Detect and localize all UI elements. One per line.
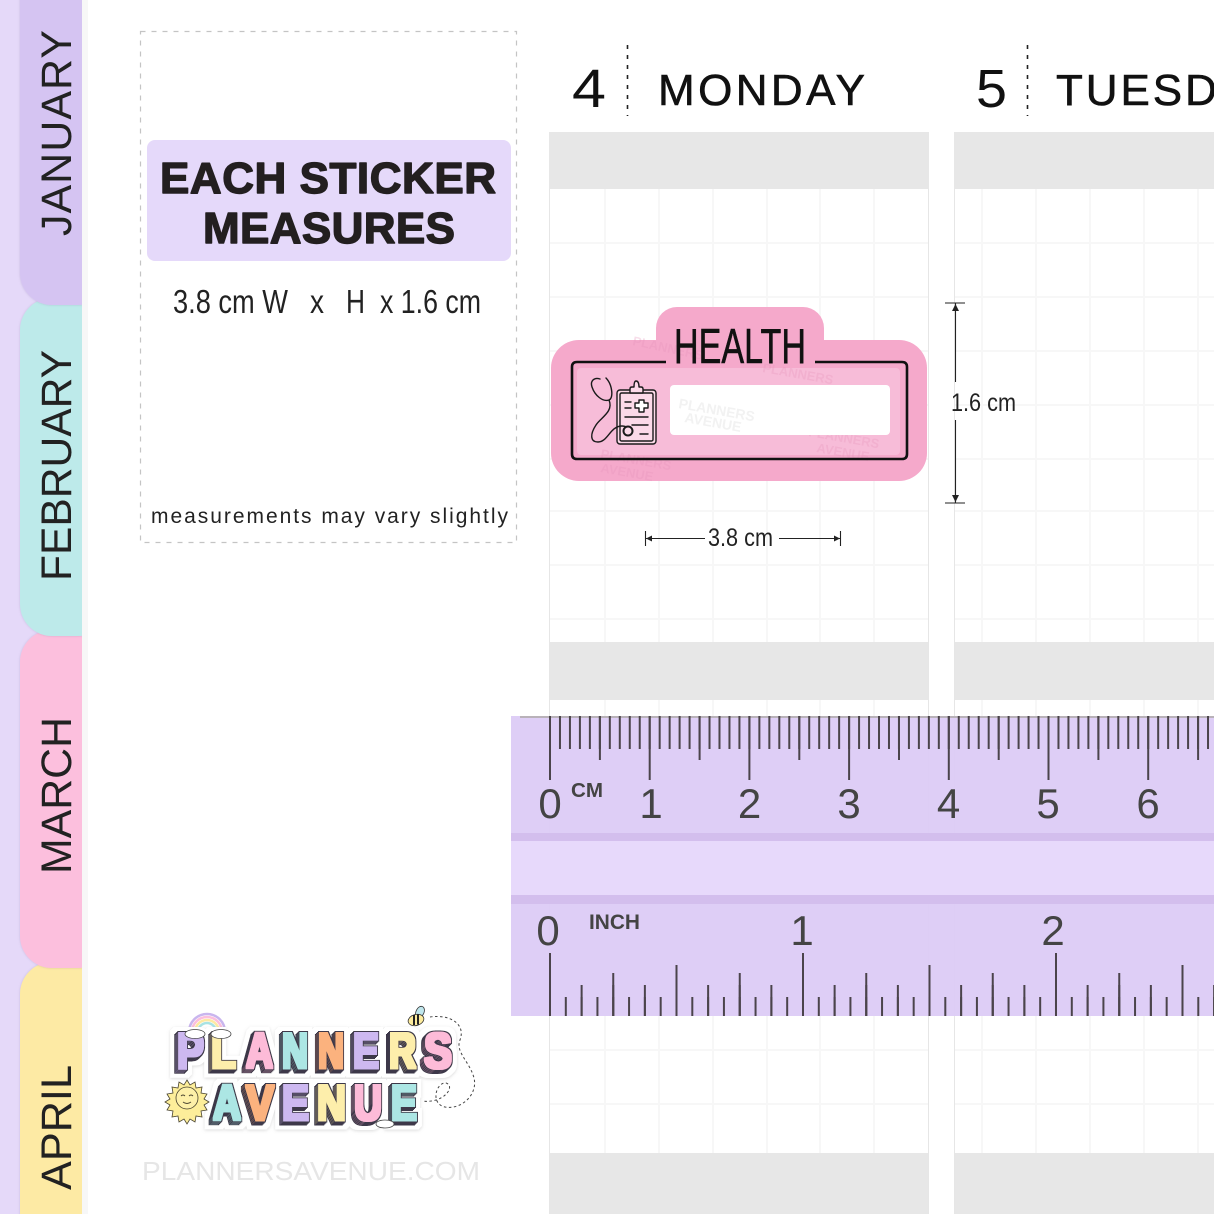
tab: February: [20, 298, 110, 636]
ruler: centimetre numbers: 2: [738, 780, 761, 827]
planner column: Tuesday: [954, 132, 1214, 1214]
watermarks: PLANNERS: [807, 424, 881, 451]
logo: letters: L: [211, 1023, 236, 1079]
logo: clouds: [185, 1030, 394, 1128]
logo: dotted bee trail: [422, 1016, 475, 1107]
ruler: inch numbers: 0: [536, 907, 560, 954]
tab: January: [20, 0, 110, 305]
ruler: centimetre numbers: 5: [1036, 780, 1060, 827]
logo: letters: [177, 1023, 452, 1131]
heading: each sticker measures: [147, 140, 511, 261]
text: dimensions: [173, 283, 481, 320]
ruler: INCH label: INCH: [589, 911, 640, 934]
watermarks: AVENUE: [599, 460, 655, 484]
header: Tuesday: [976, 45, 1214, 119]
planner column: Monday: [549, 132, 929, 1214]
ruler: centimetre numbers: 0: [538, 780, 562, 827]
logo: letters: U: [354, 1075, 382, 1131]
sticker: write-in box: [670, 385, 890, 435]
ruler: inch ticks: [549, 984, 1214, 1006]
heading: each sticker measures: EACH STICKER: [160, 154, 496, 203]
ruler: centimetre numbers: 3: [837, 780, 861, 827]
logo: letters: E: [391, 1075, 417, 1131]
logo: rainbow: [189, 1014, 225, 1032]
heading: each sticker measures: MEASURES: [203, 204, 455, 253]
text: dimensions: 3.8 cm W: [173, 283, 289, 320]
tab: April: [20, 962, 110, 1214]
watermarks: PLANNERS: [761, 360, 835, 387]
sticker: HEALTH label: HEALTH: [674, 320, 806, 374]
dimension: width 3.8 cm: [646, 524, 840, 552]
logo: letters: S: [424, 1023, 452, 1079]
text: dimensions: x: [310, 283, 324, 320]
dimension: height 1.6 cm: [945, 303, 1016, 503]
header: Monday: [572, 45, 865, 119]
ruler: centimetre numbers: [538, 780, 1160, 827]
tab: March: [20, 630, 110, 968]
logo: letters: P: [177, 1023, 204, 1079]
logo: letters: N: [282, 1023, 308, 1079]
logo: letters: A: [213, 1075, 241, 1131]
logo: sun: [165, 1080, 209, 1124]
watermarks: AVENUE: [815, 440, 871, 464]
logo: letters: N: [318, 1023, 344, 1079]
text: dimensions: x 1.6 cm: [380, 283, 481, 320]
dimension: height 1.6 cm: 1.6 cm: [951, 389, 1016, 417]
sidebar: month tabs: [0, 0, 142, 1214]
logo: letters: N: [317, 1075, 346, 1131]
ruler: centimetre numbers: 6: [1136, 780, 1160, 827]
ruler: inch numbers: [536, 907, 1065, 954]
ruler: [511, 716, 1214, 1016]
watermarks: PLANNERS: [599, 446, 673, 473]
dimension: width 3.8 cm: 3.8 cm: [708, 524, 773, 552]
icon: clipboard and stethoscope: [591, 378, 656, 444]
logo: letters: R: [389, 1023, 416, 1079]
logo: letters: V: [246, 1075, 275, 1131]
logo: bee: [407, 1005, 426, 1027]
ruler: centimetre numbers: 1: [639, 780, 663, 827]
ruler: centimetre ticks: [549, 732, 1214, 748]
logo: letters: E: [353, 1023, 379, 1079]
text: dimensions: H: [346, 283, 365, 320]
ruler: inch numbers: 2: [1041, 907, 1065, 954]
watermarks: PLANNERS: [631, 333, 705, 363]
tab: February: FEBRUARY: [33, 350, 81, 581]
tab: January: JANUARY: [33, 30, 81, 236]
header: Monday: MONDAY: [658, 66, 865, 115]
header: Monday: 4: [572, 59, 606, 119]
sticker: health: AVENUE: [683, 409, 743, 435]
text: disclaimer: measurements may vary slightly: [151, 505, 508, 528]
logo: website: PLANNERSAVENUE.COM: [142, 1156, 480, 1186]
logo: Planners Avenue: [142, 1005, 480, 1186]
header: Tuesday: 5: [976, 59, 1007, 119]
ruler: CM label: CM: [571, 780, 603, 802]
logo: letters: E: [282, 1075, 309, 1131]
tab: April: APRIL: [33, 1065, 81, 1190]
sticker: black frame: [572, 362, 907, 459]
tab: March: MARCH: [33, 717, 81, 874]
ruler: centimetre numbers: 4: [937, 780, 960, 827]
watermarks: [599, 333, 881, 484]
panel: measurement info: [140, 32, 516, 542]
sticker: health: PLANNERS: [677, 395, 756, 424]
logo: letters: A: [246, 1023, 273, 1079]
sticker: health: [551, 307, 927, 484]
ruler: inch numbers: 1: [790, 907, 814, 954]
